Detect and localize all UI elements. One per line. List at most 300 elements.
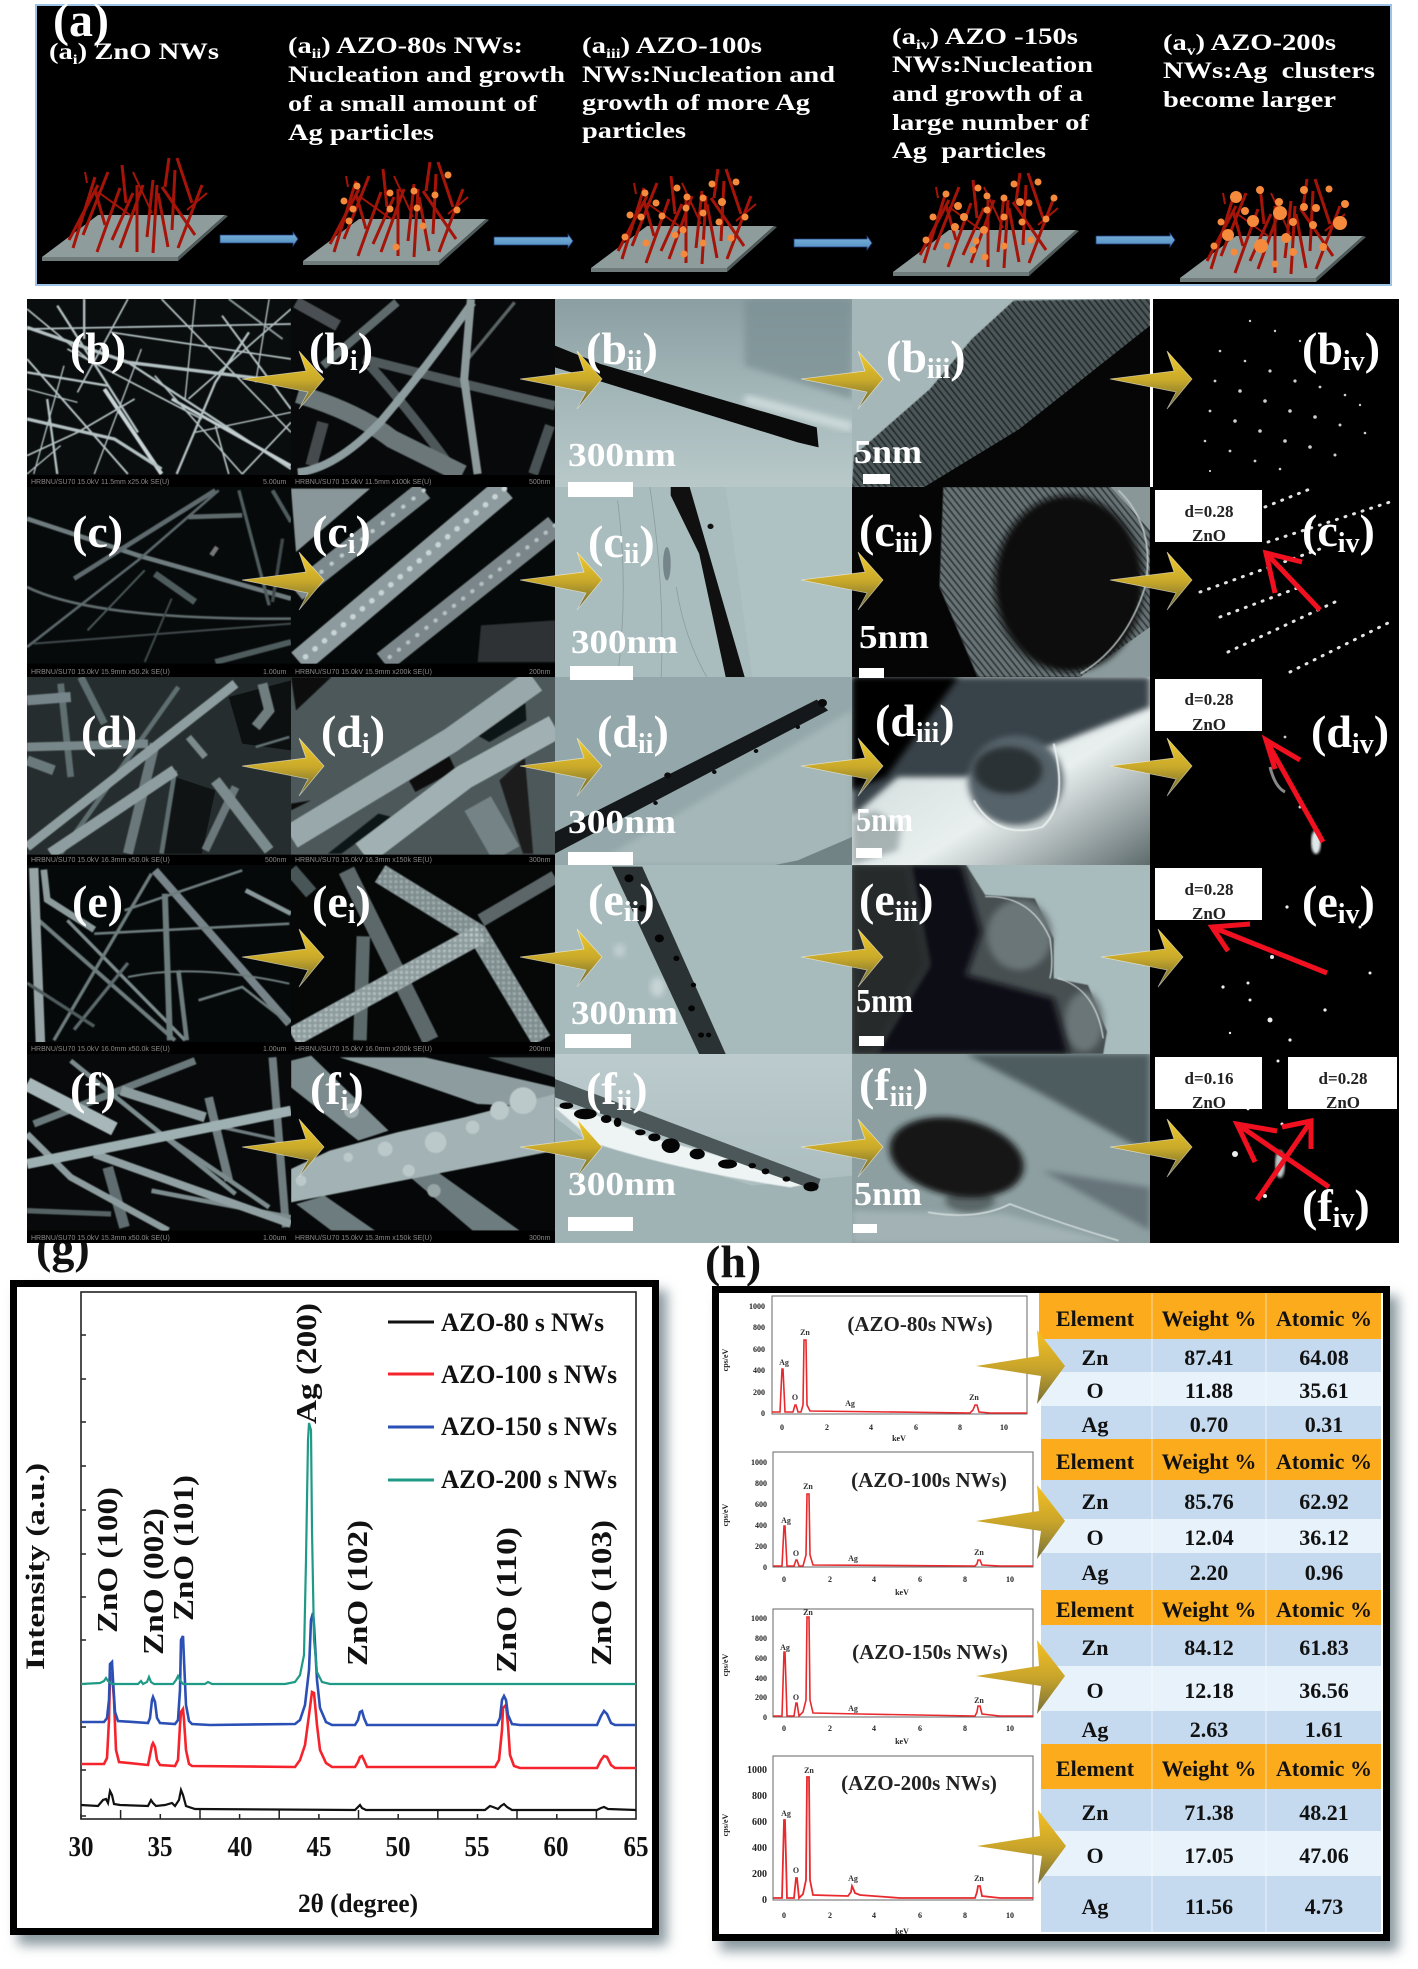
callout: d=0.16 f: ZnO	[1192, 1093, 1226, 1112]
tile labels row e: (e	[312, 876, 348, 927]
SEM instrument captions: HRBNU/SU70 15.0kV 15.3mm x50.0k SE(U)	[31, 1235, 170, 1242]
chart: AZO-150s EDS: O	[793, 1693, 799, 1702]
SEM instrument captions: 200nm	[529, 669, 551, 676]
peak labels	[93, 1303, 618, 1673]
SEM instrument captions: 1.00um	[263, 669, 287, 676]
chart: AZO-100s EDS: 600	[755, 1500, 767, 1509]
photo: civ diffraction	[1150, 487, 1399, 677]
chart: AZO-200s EDS: 1000	[747, 1765, 767, 1776]
gold arrows row b	[242, 351, 1192, 409]
panel: micrograph grid	[27, 299, 1399, 1243]
tile labels row c: (c)	[72, 506, 123, 557]
photo: ciii HRTEM	[852, 487, 1150, 677]
arrow: red f left	[1237, 1124, 1329, 1187]
table 2: Atomic %	[1276, 1449, 1372, 1474]
photo: ei SEM	[291, 865, 555, 1054]
gold arrows row f	[242, 1119, 1192, 1177]
plot frame and axes	[81, 1292, 636, 1819]
chart: AZO-100s EDS	[721, 1452, 1033, 1597]
tile labels row c: iv	[1338, 528, 1360, 559]
caption: AZO-200s	[1163, 30, 1375, 112]
SEM instrument captions: HRBNU/SU70 15.0kV 16.3mm x150k SE(U)	[295, 857, 432, 864]
tile labels row c: ii	[624, 539, 640, 570]
x-axis tick labels: 35	[148, 1832, 172, 1863]
tile labels row f: (f)	[70, 1063, 116, 1114]
scale bars and labels	[565, 434, 929, 1233]
arrow: step 3	[794, 236, 872, 250]
chart: AZO-100s EDS: 1000	[751, 1458, 767, 1467]
chart: AZO-80s EDS: 2	[825, 1423, 829, 1432]
SEM instrument captions: 500nm	[529, 479, 551, 486]
callout: d=0.28 d	[1155, 679, 1262, 734]
tile labels row b: )	[950, 331, 966, 382]
legend: AZO-150 s NWs	[441, 1412, 617, 1441]
chart: AZO-150s EDS: 400	[755, 1674, 767, 1683]
chart: AZO-150s EDS: (AZO-150s NWs)	[852, 1640, 1008, 1664]
callout: d=0.28 c: ZnO	[1192, 526, 1226, 545]
photo: e SEM low magnification	[27, 865, 291, 1054]
tile labels row c: )	[918, 505, 933, 556]
table 3: 61.83	[1299, 1635, 1349, 1660]
peak labels: ZnO (103)	[587, 1520, 618, 1666]
tile labels row e: )	[356, 876, 371, 927]
photo: diii HRTEM	[852, 677, 1150, 865]
caption: AZO-150s: iv	[916, 38, 930, 53]
table 3: Element	[1056, 1597, 1135, 1622]
tile labels row c: )	[356, 506, 371, 557]
photo: biv diffraction	[1153, 299, 1399, 487]
chart: AZO-150s EDS: 200	[755, 1693, 767, 1702]
tile labels row b	[70, 323, 1380, 385]
gold arrows row c	[242, 552, 1192, 610]
caption: AZO-150s: large number of	[892, 110, 1089, 135]
chart: AZO-200s EDS	[721, 1756, 1033, 1936]
chart: AZO-80s EDS: 400	[753, 1366, 765, 1375]
table 2: 2.20	[1190, 1560, 1228, 1585]
chart: AZO-80s EDS	[721, 1296, 1027, 1443]
caption: AZO-200s: ) AZO-200s	[1196, 30, 1336, 55]
tile labels row c: )	[639, 516, 655, 567]
SEM instrument captions: HRBNU/SU70 15.0kV 16.0mm x50.0k SE(U)	[31, 1046, 170, 1053]
legend: AZO-100 s NWs	[441, 1360, 617, 1389]
table 1: Zn	[1082, 1345, 1108, 1370]
scale: 5nm b	[854, 434, 922, 484]
caption: AZO-200s: NWs:Ag clusters	[1163, 58, 1375, 83]
chart: AZO-200s EDS: 0	[782, 1911, 786, 1920]
callout: d=0.28 f: ZnO	[1326, 1093, 1360, 1112]
scale: 5nm b: 5nm	[854, 434, 922, 471]
callout: d=0.28 e	[1155, 868, 1262, 923]
scale: 5nm e	[856, 983, 913, 1046]
curve: AZO-80 s	[81, 1790, 636, 1810]
gold arrows to tables	[976, 1330, 1066, 1884]
tile labels row b: )	[1365, 323, 1380, 374]
scale: 5nm f: 5nm	[854, 1176, 922, 1213]
scale: 300nm e	[565, 995, 678, 1048]
photo: biii HRTEM	[852, 299, 1150, 487]
peak labels: Ag (200)	[292, 1303, 323, 1424]
gold arrows row e	[242, 929, 1183, 987]
chart: AZO-100s EDS: cps/eV	[721, 1503, 730, 1526]
tile labels row f: (f	[586, 1063, 617, 1114]
caption: AZO-100s: particles	[582, 118, 686, 143]
chart: AZO-80s EDS: 6	[914, 1423, 918, 1432]
caption: AZO-150s: and growth of a	[892, 81, 1084, 106]
photo: c SEM low magnification	[27, 487, 291, 677]
curve: AZO-150 s	[81, 1613, 636, 1725]
table 1: Weight %	[1162, 1306, 1256, 1331]
chart: AZO-100s EDS: 10	[1006, 1575, 1014, 1584]
tile labels row b: )	[642, 323, 658, 374]
peak labels: ZnO (100)	[93, 1487, 124, 1633]
gold arrows row d	[242, 738, 1192, 796]
caption: AZO-100s: growth of more Ag	[582, 90, 811, 115]
caption: AZO-150s: ) AZO -150s	[930, 24, 1078, 49]
chart: AZO-80s EDS: 600	[753, 1345, 765, 1354]
photo: div diffraction	[1150, 677, 1399, 865]
chart: AZO-200s EDS: 2	[828, 1911, 832, 1920]
caption: AZO-100s: iii	[606, 47, 621, 62]
chart: AZO-80s EDS: 8	[958, 1423, 962, 1432]
chart: AZO-100s EDS: 2	[828, 1575, 832, 1584]
chart: AZO-200s EDS: 4	[872, 1911, 876, 1920]
table 1: Element	[1056, 1306, 1135, 1331]
caption: AZO-80s: (a	[288, 33, 307, 58]
photo: d SEM low magnification	[27, 677, 291, 865]
SEM instrument captions	[31, 479, 551, 1242]
tile labels row f: i	[341, 1086, 349, 1117]
photo: di SEM	[291, 677, 555, 865]
table 1: Atomic %	[1276, 1306, 1372, 1331]
tile labels row c	[72, 505, 1375, 570]
caption: AZO-200s: become larger	[1163, 87, 1336, 112]
chart: AZO-150s EDS: cps/eV	[721, 1653, 730, 1676]
tile labels row c: iii	[895, 528, 918, 559]
chart: AZO-100s EDS: O	[793, 1549, 799, 1558]
tile labels row f	[70, 1059, 1370, 1234]
tile labels row d: iii	[916, 718, 939, 749]
caption: AZO-80s: ii	[312, 47, 321, 62]
caption: AZO-100s: NWs:Nucleation and	[582, 62, 835, 87]
table 4: Ag	[1082, 1894, 1108, 1919]
chart: AZO-80s EDS: 200	[753, 1388, 765, 1397]
table 2	[1041, 1439, 1381, 1590]
SEM instrument captions: HRBNU/SU70 15.0kV 11.5mm x25.0k SE(U)	[31, 479, 169, 486]
caption: AZO-80s: ) AZO-80s NWs:	[321, 33, 523, 58]
tile labels row b: (b)	[70, 323, 126, 374]
heading: (h): (h)	[705, 1236, 761, 1287]
peak labels: ZnO (101)	[169, 1475, 200, 1621]
tile labels row b: (b	[586, 323, 627, 374]
table 4: Atomic %	[1276, 1756, 1372, 1781]
callout: d=0.28 d: ZnO	[1192, 715, 1226, 734]
SEM instrument captions: 5.00um	[263, 479, 287, 486]
table 4: Weight %	[1162, 1756, 1256, 1781]
chart: AZO-200s EDS: 400	[752, 1843, 767, 1854]
callout: d=0.28 c: d=0.28	[1185, 502, 1233, 521]
chart: AZO-100s EDS: 400	[755, 1521, 767, 1530]
peak labels: ZnO (002)	[139, 1508, 170, 1655]
table 3: Atomic %	[1276, 1597, 1372, 1622]
tile labels row b: (b	[309, 323, 350, 374]
chart: AZO-80s EDS: O	[792, 1393, 798, 1402]
chart: AZO-200s EDS: 800	[752, 1791, 767, 1802]
tile labels row d: )	[653, 706, 669, 757]
x-axis tick labels: 30	[68, 1832, 94, 1863]
table 1	[1039, 1293, 1381, 1439]
column dividers	[1152, 1293, 1266, 1932]
chart: AZO-100s EDS: 0	[782, 1575, 786, 1584]
chart: AZO-150s EDS: 10	[1006, 1724, 1014, 1733]
tile labels row f: )	[348, 1063, 364, 1114]
callout: d=0.28 e: d=0.28	[1185, 880, 1233, 899]
tile labels row c: i	[348, 529, 356, 560]
photo: eii TEM	[555, 865, 852, 1054]
chart: AZO-150s EDS: 600	[755, 1654, 767, 1663]
tile labels row e: ii	[624, 897, 640, 928]
tile labels row b: (b	[886, 331, 927, 382]
photo: ci SEM	[291, 487, 555, 677]
chart: AZO-80s EDS: (AZO-80s NWs)	[847, 1312, 993, 1336]
chart: AZO-150s EDS: 6	[918, 1724, 922, 1733]
scale: 300nm f: 300nm	[568, 1166, 676, 1203]
photo: fi SEM	[291, 1054, 555, 1243]
x-axis tick labels: 60	[544, 1832, 568, 1863]
chart: AZO-200s EDS: 600	[752, 1817, 767, 1828]
SEM instrument captions: HRBNU/SU70 15.0kV 16.3mm x50.0k SE(U)	[31, 857, 170, 864]
x-axis tick labels	[68, 1832, 648, 1863]
table 2: Zn	[1082, 1489, 1108, 1514]
tile labels row f: ii	[617, 1086, 632, 1117]
tile labels row c: (c	[588, 516, 624, 567]
arrow: red c	[1266, 553, 1320, 610]
caption: ZnO NWs: ) ZnO NWs	[78, 39, 219, 64]
tile labels row e	[72, 874, 1375, 930]
callout: d=0.28 f: d=0.28	[1319, 1069, 1367, 1088]
tile labels row c: (c	[859, 505, 895, 556]
tile labels row d	[81, 695, 1389, 760]
table 1: 64.08	[1299, 1345, 1349, 1370]
callout: d=0.16 f: d=0.16	[1185, 1069, 1233, 1088]
chart: AZO-150s EDS: Ag	[848, 1704, 858, 1713]
x-axis tick labels: 45	[306, 1832, 332, 1863]
chart: AZO-100s EDS: keV	[895, 1588, 909, 1597]
arrow: red e	[1212, 924, 1327, 973]
tile labels row d: (d	[321, 706, 362, 757]
tile labels row c: )	[1360, 505, 1375, 556]
table 2: 12.04	[1184, 1525, 1234, 1550]
scale: 300nm e: 300nm	[571, 995, 678, 1032]
chart: AZO-150s EDS: 2	[828, 1724, 832, 1733]
SEM instrument captions: 1.00um	[263, 1235, 287, 1242]
table 2: 0.96	[1305, 1560, 1343, 1585]
scale: 300nm f	[568, 1166, 676, 1231]
photo: fii TEM	[555, 1054, 852, 1243]
table 3: O	[1086, 1678, 1104, 1703]
caption: AZO-80s: of a small amount of	[288, 91, 537, 116]
chart: AZO-200s EDS: Zn	[974, 1874, 984, 1883]
heading: (g): (g)	[36, 1222, 90, 1273]
panel: (h) EDS spectra and tables	[716, 1290, 1398, 1951]
caption: AZO-100s: (a	[582, 33, 601, 58]
curve: AZO-100 s	[81, 1673, 636, 1768]
tile labels row f: )	[632, 1063, 648, 1114]
tile labels row d: )	[939, 695, 955, 746]
tile labels row b: ii	[627, 346, 643, 377]
chart: AZO-80s EDS: Ag	[845, 1399, 855, 1408]
tile labels row b: )	[358, 323, 373, 374]
tile labels row d: ii	[638, 729, 654, 760]
photo: f SEM low magnification	[27, 1054, 291, 1243]
tile labels row f: )	[1354, 1180, 1370, 1231]
tile labels row e: )	[639, 874, 655, 925]
table 3: 84.12	[1184, 1635, 1234, 1660]
scale: 300nm b: 300nm	[568, 437, 676, 474]
photo: bi SEM	[291, 299, 555, 487]
callout: d=0.28 d: d=0.28	[1185, 690, 1233, 709]
tile labels row e: )	[1360, 876, 1375, 927]
tile labels row b: iv	[1343, 346, 1365, 377]
tile labels row b: i	[350, 346, 358, 377]
photo: fiv diffraction	[1150, 1054, 1399, 1243]
chart: AZO-80s EDS: 4	[869, 1423, 873, 1432]
chart: AZO-200s EDS: Ag	[781, 1809, 791, 1818]
tile labels row e: iii	[895, 897, 918, 928]
table 1: 11.88	[1185, 1378, 1233, 1403]
photo: b SEM low magnification	[27, 299, 291, 487]
chart: AZO-150s EDS: 0	[782, 1724, 786, 1733]
x-axis tick labels: 40	[228, 1832, 252, 1863]
chart: AZO-200s EDS: 0	[762, 1895, 767, 1906]
chart: AZO-150s EDS: 800	[755, 1634, 767, 1643]
table 2: 85.76	[1184, 1489, 1234, 1514]
tile labels row c: (c	[1302, 505, 1338, 556]
SEM instrument captions: 200nm	[529, 1046, 551, 1053]
table 1: 87.41	[1184, 1345, 1234, 1370]
caption: AZO-100s: ) AZO-100s	[621, 33, 762, 58]
table 3: 36.56	[1299, 1678, 1349, 1703]
caption: AZO-80s: Nucleation and growth	[288, 62, 565, 87]
icon: nanowires with Ag clusters	[1180, 179, 1366, 282]
arrow: step 1	[220, 232, 298, 246]
table 4: 48.21	[1299, 1800, 1349, 1825]
photo: bii TEM	[555, 299, 852, 487]
x-axis tick labels: 50	[386, 1832, 410, 1863]
chart: AZO-150s EDS	[721, 1608, 1033, 1746]
legend: AZO-80 s NWs	[441, 1308, 604, 1337]
chart: AZO-150s EDS: 8	[963, 1724, 967, 1733]
table 2: 36.12	[1299, 1525, 1349, 1550]
SEM instrument captions: 300nm	[529, 857, 551, 864]
table 4: 17.05	[1184, 1843, 1234, 1868]
tile labels row f: (f	[859, 1059, 890, 1110]
chart: AZO-150s EDS: Zn	[974, 1696, 984, 1705]
tile labels row f: (f	[310, 1063, 341, 1114]
table 3: Ag	[1082, 1717, 1108, 1742]
chart: AZO-80s EDS: Zn	[969, 1393, 979, 1402]
caption: AZO-150s	[892, 24, 1093, 163]
tile labels row b: iii	[927, 354, 950, 385]
y-axis title: Intensity (a.u.)	[21, 1463, 50, 1670]
chart: AZO-100s EDS: Ag	[781, 1516, 791, 1525]
tile labels row e: i	[348, 899, 356, 930]
scale: 300nm b	[568, 437, 676, 497]
table 1: O	[1086, 1378, 1104, 1403]
icon: nanowires with many Ag	[893, 173, 1079, 276]
panel: (a) growth schematic	[36, 0, 1391, 285]
icon: bare ZnO nanowires	[42, 158, 228, 261]
chart: AZO-150s EDS: 4	[872, 1724, 876, 1733]
SEM instrument captions: HRBNU/SU70 15.0kV 15.9mm x50.2k SE(U)	[31, 669, 170, 676]
chart: AZO-200s EDS: cps/eV	[721, 1813, 730, 1836]
scale: 300nm c: 300nm	[571, 624, 678, 661]
chart: AZO-80s EDS: 0	[761, 1409, 765, 1418]
chart: AZO-200s EDS: Ag	[848, 1874, 858, 1883]
chart: AZO-200s EDS: 8	[963, 1911, 967, 1920]
chart: AZO-100s EDS: 800	[755, 1479, 767, 1488]
tile labels row d: )	[1374, 706, 1389, 757]
photo: eiv diffraction	[1150, 865, 1399, 1054]
table 4: 71.38	[1184, 1800, 1234, 1825]
chart: AZO-100s EDS: 200	[755, 1542, 767, 1551]
icon: nanowires with more Ag	[591, 169, 777, 272]
caption: AZO-200s: v	[1187, 44, 1196, 59]
table 1: 0.31	[1305, 1412, 1343, 1437]
caption: AZO-150s: Ag particles	[892, 138, 1046, 163]
arrow: red d	[1266, 740, 1323, 842]
table 1: 35.61	[1299, 1378, 1349, 1403]
table 3: Weight %	[1162, 1597, 1256, 1622]
arrow: step 4	[1096, 233, 1175, 247]
tile labels row f: (f	[1302, 1180, 1333, 1231]
scale: 300nm c	[570, 624, 678, 680]
chart: AZO-80s EDS: 10	[1000, 1423, 1008, 1432]
table 2: Element	[1056, 1449, 1135, 1474]
legend: AZO-200 s NWs	[441, 1465, 617, 1494]
chart: AZO-100s EDS: Zn	[974, 1548, 984, 1557]
callout: d=0.28 e: ZnO	[1192, 904, 1226, 923]
chart: AZO-80s EDS: 0	[780, 1423, 784, 1432]
tile labels row f: iii	[890, 1082, 913, 1113]
table 4: Zn	[1082, 1800, 1108, 1825]
chart: AZO-150s EDS: Ag	[780, 1643, 790, 1652]
table 4	[1041, 1744, 1381, 1932]
scale: 300nm d: 300nm	[568, 804, 676, 841]
scale: 5nm d	[856, 802, 913, 858]
table 2: Ag	[1082, 1560, 1108, 1585]
tile labels row d: (d)	[81, 706, 137, 757]
peak labels: ZnO (102)	[343, 1520, 374, 1666]
chart: AZO-200s EDS: Zn	[804, 1766, 814, 1775]
callout: d=0.28 f	[1288, 1057, 1397, 1112]
chart: AZO-200s EDS: 10	[1006, 1911, 1014, 1920]
SEM instrument captions: HRBNU/SU70 15.0kV 16.0mm x200k SE(U)	[295, 1046, 432, 1053]
photo: fiii HRTEM	[852, 1054, 1150, 1243]
x-axis title: 2θ (degree)	[298, 1889, 418, 1918]
tile labels row d: iv	[1352, 729, 1374, 760]
chart: AZO-200s EDS: (AZO-200s NWs)	[841, 1771, 997, 1795]
table 4: 11.56	[1185, 1894, 1233, 1919]
tile labels row d: )	[370, 706, 385, 757]
table 4: Element	[1056, 1756, 1135, 1781]
chart: AZO-100s EDS: 8	[963, 1575, 967, 1584]
tile labels row e: (e)	[72, 876, 123, 927]
SEM instrument captions: HRBNU/SU70 15.0kV 11.5mm x100k SE(U)	[295, 479, 431, 486]
chart: AZO-100s EDS: 4	[872, 1575, 876, 1584]
chart: AZO-100s EDS: 0	[763, 1563, 767, 1572]
x-axis tick labels: 55	[464, 1832, 490, 1863]
tile labels row d: i	[362, 729, 370, 760]
